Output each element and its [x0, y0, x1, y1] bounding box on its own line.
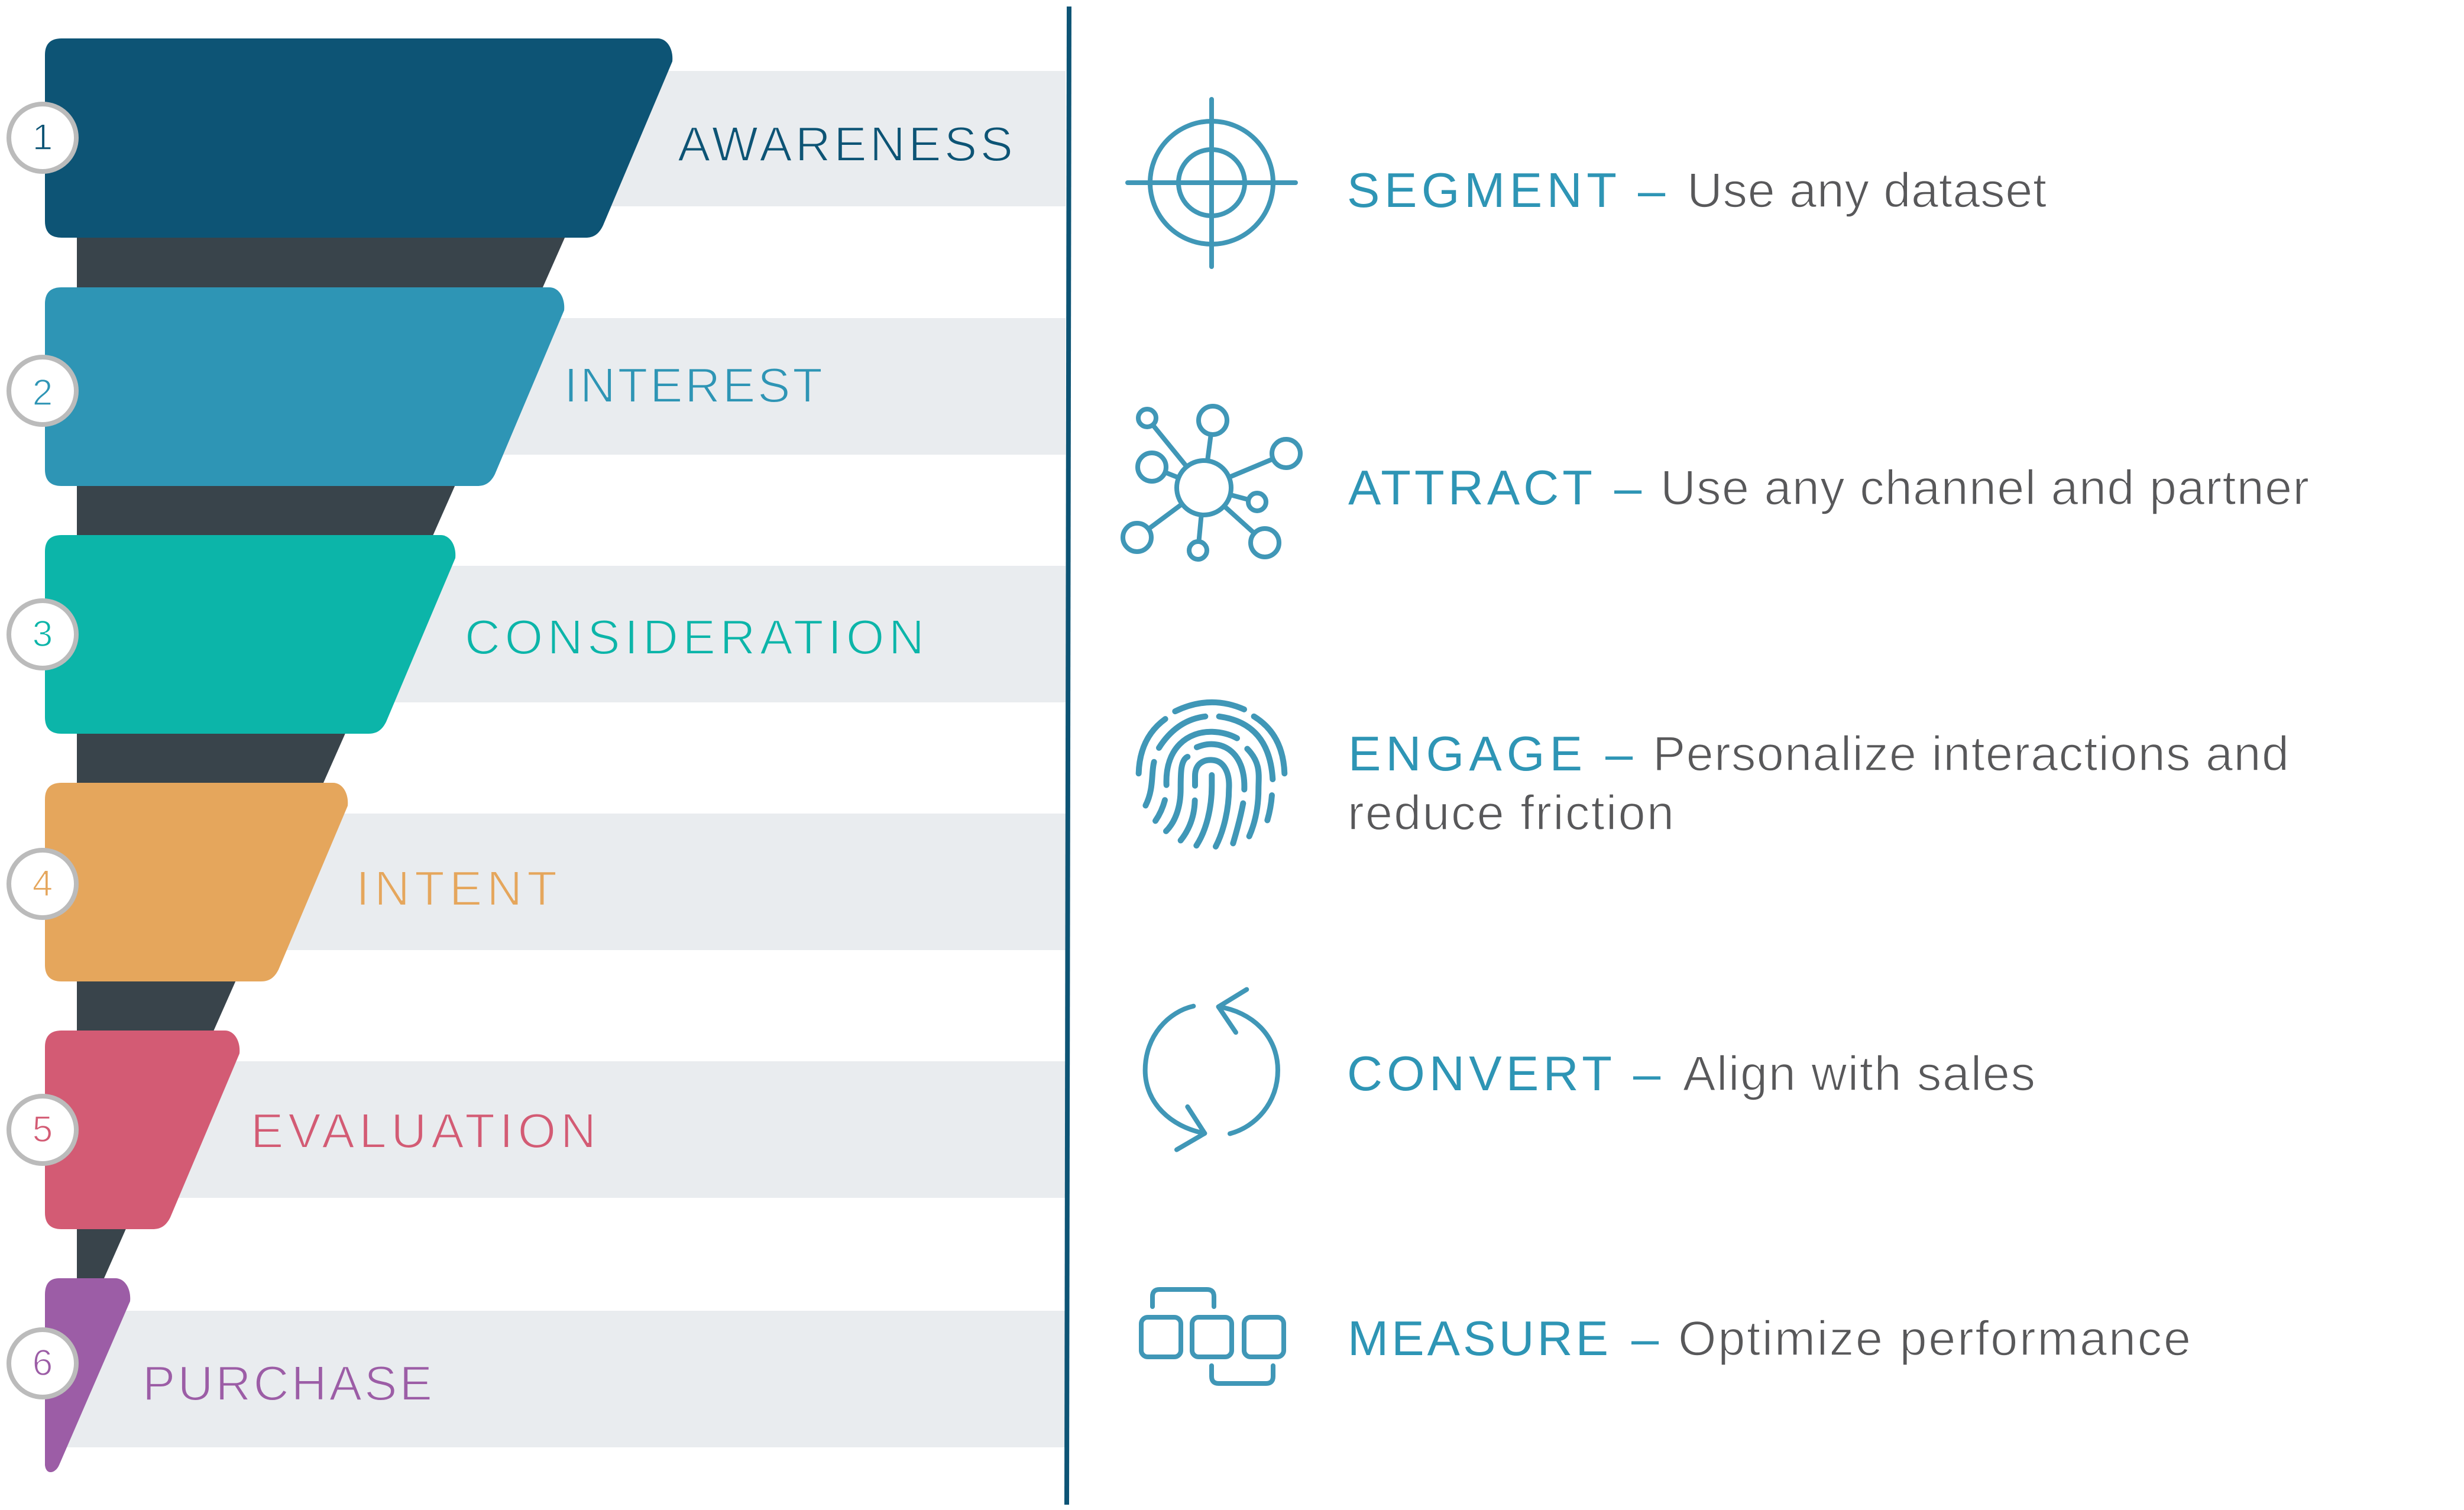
- number 2: 2: [33, 372, 53, 413]
- funnel block 1: [45, 38, 672, 238]
- number 6: [9, 1330, 76, 1397]
- panel: funnel stage 6 purchase: [9, 1278, 432, 1472]
- number 5: 5: [33, 1109, 53, 1150]
- icon: fingerprint: [1139, 702, 1284, 847]
- icon: cycle arrows: [1145, 990, 1278, 1150]
- panel: funnel stage 5 evaluation: [9, 1031, 596, 1229]
- number 2: [9, 357, 76, 425]
- funnel block 6: [45, 1278, 130, 1472]
- measure text: MEASURE: [1348, 1311, 1608, 1366]
- icon: crosshair target: [1128, 99, 1296, 267]
- convert text: –: [1633, 1046, 1661, 1101]
- label awareness: AWARENESS: [678, 116, 1013, 171]
- attract text: –: [1614, 460, 1642, 515]
- measure text: [1348, 1311, 2191, 1366]
- number 6: 6: [33, 1343, 53, 1383]
- engage text: reduce friction: [1348, 785, 1674, 840]
- number 1: 1: [33, 117, 53, 158]
- engage text: [1348, 726, 2289, 840]
- engage text: –: [1605, 726, 1633, 781]
- convert text: [1347, 1046, 2035, 1101]
- convert text: Align with sales: [1683, 1046, 2035, 1101]
- funnel block 2: [45, 287, 564, 486]
- number 4: [9, 850, 76, 918]
- icon: network nodes: [1123, 406, 1300, 559]
- funnel block 5: [45, 1031, 239, 1229]
- panel: engage row: [1139, 702, 2289, 847]
- convert text: CONVERT: [1347, 1046, 1612, 1101]
- segment text: [1347, 163, 2047, 218]
- segment text: –: [1638, 163, 1666, 218]
- panel: measure row: [1141, 1289, 2191, 1383]
- panel: funnel stage 4 intent: [9, 783, 557, 981]
- panel: attract row: [1123, 406, 2309, 559]
- icon: linked boxes: [1141, 1289, 1284, 1383]
- measure text: Optimize performance: [1678, 1311, 2191, 1366]
- vertical divider: [1064, 7, 1071, 1505]
- segment text: Use any dataset: [1687, 163, 2047, 218]
- attract text: [1348, 460, 2309, 515]
- panel: funnel stage 2 interest: [9, 287, 823, 486]
- number 3: 3: [33, 614, 53, 654]
- number 5: [9, 1096, 76, 1164]
- label evaluation: EVALUATION: [251, 1103, 596, 1158]
- label bands: [59, 71, 1066, 1447]
- panel: funnel stage 1 awareness: [9, 38, 1013, 238]
- engage text: ENGAGE: [1348, 726, 1582, 781]
- funnel block 3: [45, 535, 455, 734]
- panel: funnel stage 3 consideration: [9, 535, 924, 734]
- engage text: Personalize interactions and: [1653, 726, 2289, 781]
- segment text: SEGMENT: [1347, 163, 1617, 218]
- attract text: Use any channel and partner: [1660, 460, 2309, 515]
- number 1: [9, 104, 76, 171]
- number 3: [9, 601, 76, 668]
- label interest: INTEREST: [564, 358, 823, 413]
- funnel block 4: [45, 783, 348, 981]
- label purchase: PURCHASE: [143, 1356, 432, 1411]
- label intent: INTENT: [356, 861, 557, 916]
- number 4: 4: [33, 863, 53, 904]
- funnel backing: [77, 236, 565, 1280]
- measure text: –: [1631, 1311, 1659, 1366]
- panel: convert row: [1145, 990, 2035, 1150]
- attract text: ATTRACT: [1348, 460, 1592, 515]
- label consideration: CONSIDERATION: [465, 610, 924, 665]
- panel: segment row: [1128, 99, 2047, 267]
